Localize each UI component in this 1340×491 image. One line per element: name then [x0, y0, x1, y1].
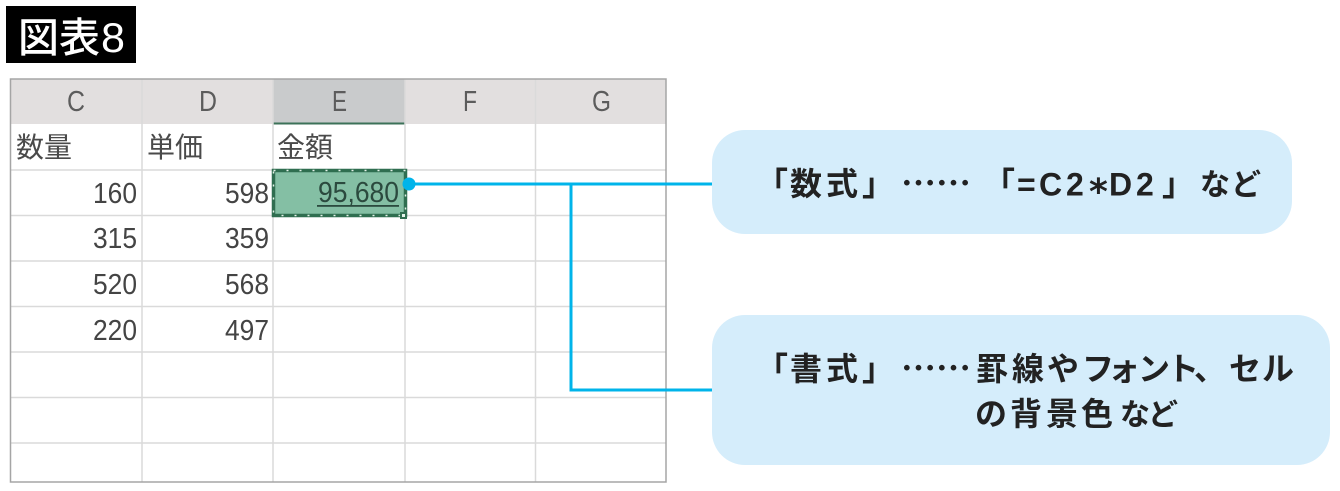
label row: 金額 — [277, 132, 333, 163]
callout: format: …… — [901, 341, 971, 392]
callout: format: など — [1120, 390, 1178, 434]
callout: formula: * — [1089, 172, 1108, 213]
callout: format — [712, 315, 1330, 465]
callout: format: の背景色 — [975, 389, 1113, 435]
quantity values: 160 — [93, 178, 137, 210]
callout: formula: など — [1200, 160, 1261, 204]
connector lines — [402, 178, 712, 390]
column header row: D — [199, 86, 217, 118]
column header row — [10, 79, 666, 124]
selected cell: amount — [272, 169, 407, 218]
unit price values: 497 — [225, 315, 269, 347]
quantity values: 315 — [93, 223, 137, 255]
callout: formula: …… — [901, 156, 971, 207]
callout: formula — [712, 130, 1292, 234]
unit price values: 568 — [225, 269, 269, 301]
title badge: 8 — [101, 14, 125, 61]
column header row: G — [592, 86, 611, 118]
callout: formula: 「数式」 — [756, 159, 894, 205]
callout: formula: 」 — [1162, 159, 1194, 205]
spreadsheet — [10, 79, 666, 482]
quantity values — [93, 178, 137, 347]
unit price values — [225, 178, 269, 347]
quantity values: 220 — [93, 315, 137, 347]
label row: 単価 — [147, 132, 203, 163]
callout: formula: =C2 — [1017, 166, 1084, 202]
label row — [16, 132, 333, 163]
unit price values: 598 — [225, 178, 269, 210]
column header row: F — [463, 86, 477, 118]
callout: format: 「書式」 — [756, 344, 894, 390]
label row: 数量 — [16, 132, 72, 163]
selected cell: amount: 95,680 — [318, 177, 399, 209]
unit price values: 359 — [225, 223, 269, 255]
column header row: E — [332, 86, 347, 118]
callout: formula: D2 — [1109, 166, 1154, 202]
title badge: 図表 — [18, 4, 100, 64]
callout: format: 罫線やフォント、セル — [976, 344, 1294, 390]
title badge — [6, 4, 136, 64]
callout: formula: 「 — [983, 159, 1015, 205]
column header row: C — [67, 86, 85, 118]
quantity values: 520 — [93, 269, 137, 301]
